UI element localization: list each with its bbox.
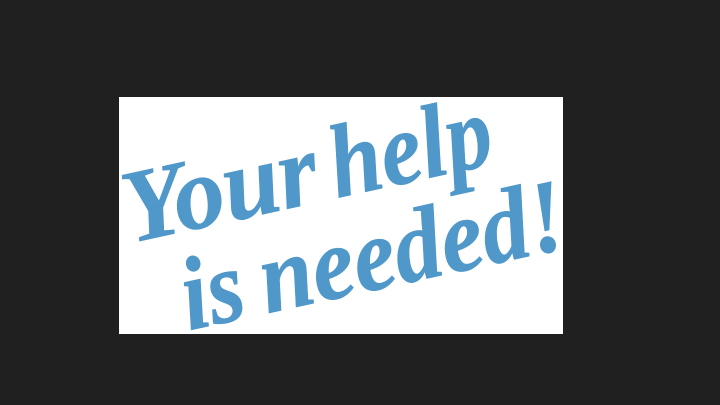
heading line 2: is (169, 227, 254, 353)
heading line 1: Your (111, 111, 330, 265)
heading: Your help is needed (111, 73, 576, 353)
heading line 1: help (318, 73, 502, 221)
panel: white card (119, 97, 563, 334)
heading line 2: needed! (247, 157, 576, 336)
heading line 2 (169, 157, 576, 353)
heading line 1 (111, 73, 502, 265)
